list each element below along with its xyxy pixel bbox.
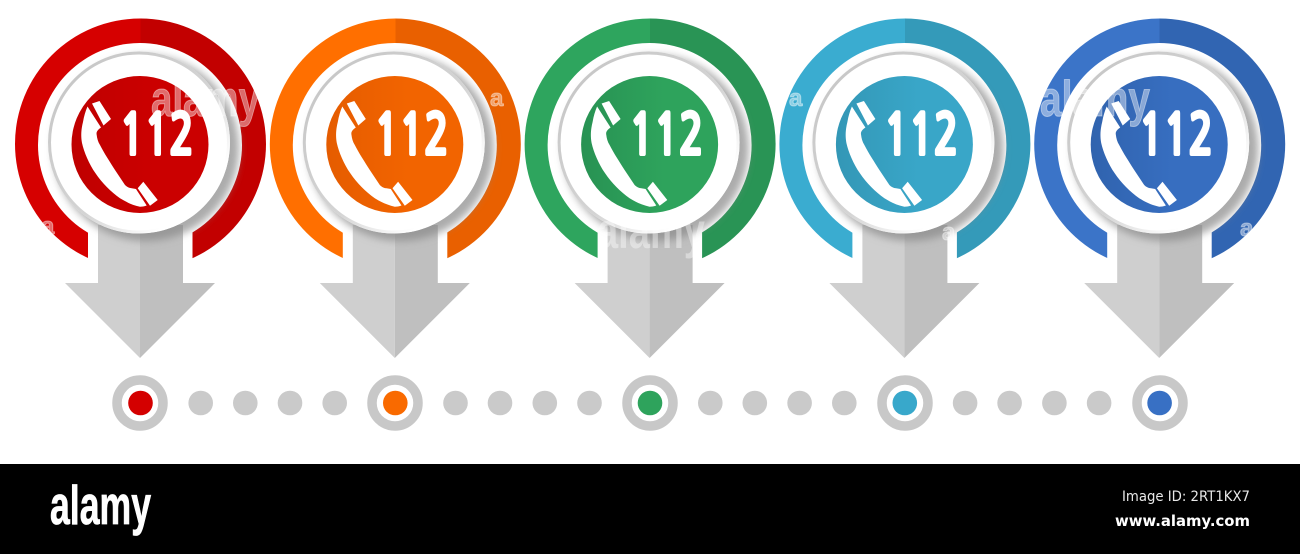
arrow: [575, 225, 725, 358]
label: 112: 112: [629, 108, 704, 164]
label: 112: 112: [884, 108, 958, 164]
label: 112: 112: [1139, 108, 1213, 164]
arrow: [829, 225, 979, 358]
watermarks: a: [789, 85, 803, 112]
footer bar: [0, 464, 1300, 554]
icon: telephone handset: [846, 101, 922, 207]
pin 5: blue: [1034, 18, 1285, 358]
watermarks: a: [942, 219, 956, 246]
pin 4: light blue: [779, 18, 1030, 358]
watermarks: a: [490, 85, 504, 112]
image id: Image ID: 2RT1KX7: [1122, 489, 1250, 505]
logo: alamy: [50, 474, 151, 536]
disc: [72, 76, 208, 213]
disc: [836, 76, 973, 213]
timeline: [117, 380, 1183, 426]
watermarks: alamy: [1040, 71, 1150, 127]
pin 3: green: [525, 18, 776, 358]
icon: telephone handset: [591, 101, 667, 207]
watermarks: alamy: [151, 71, 260, 127]
watermark on green arrow: alamy: [597, 203, 705, 259]
arrow: [1084, 225, 1234, 358]
icon: telephone handset: [336, 101, 412, 207]
pin 2: orange: [270, 18, 521, 358]
label: 112: 112: [120, 108, 194, 164]
icon: telephone handset: [1100, 101, 1177, 207]
icon: telephone handset: [81, 101, 158, 207]
label: 112: 112: [374, 108, 449, 164]
arrow: [320, 225, 470, 358]
disc: [581, 76, 718, 213]
pin 1: red: [15, 18, 266, 358]
disc: [1091, 76, 1228, 213]
watermarks: a: [1240, 215, 1254, 242]
disc: [326, 76, 463, 213]
arrow: [65, 225, 215, 358]
watermarks: [41, 71, 1254, 246]
website: www.alamy.com: [1115, 512, 1250, 530]
watermarks: a: [41, 213, 55, 240]
